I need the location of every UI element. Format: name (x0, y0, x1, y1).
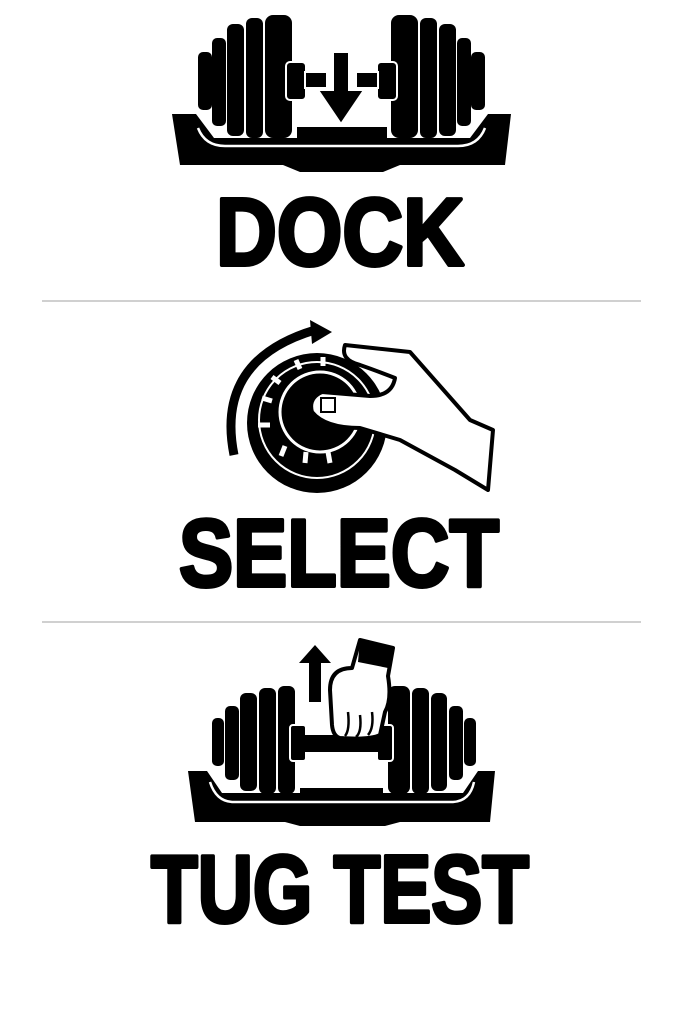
hand (330, 640, 393, 739)
tray (188, 771, 495, 826)
heading: SELECT: SELECT (179, 500, 499, 607)
up arrow (299, 645, 331, 702)
handle collars (286, 62, 397, 100)
left plates (198, 15, 292, 138)
tray (172, 114, 511, 172)
handle (290, 725, 306, 761)
heading: TUG TEST: TUG TEST (151, 836, 529, 943)
knob (247, 353, 387, 493)
divider (42, 300, 641, 302)
down arrow (318, 52, 364, 124)
heading: DOCK: DOCK (216, 179, 464, 286)
hand (311, 345, 493, 490)
icon: select knob with hand (231, 320, 493, 493)
divider (42, 621, 641, 623)
right plates (388, 686, 476, 794)
left plates (212, 686, 295, 794)
icon: tug test dumbbell (188, 640, 495, 826)
icon: dock dumbbell (172, 15, 511, 172)
right plates (391, 15, 485, 138)
rotation arrow (231, 330, 315, 455)
